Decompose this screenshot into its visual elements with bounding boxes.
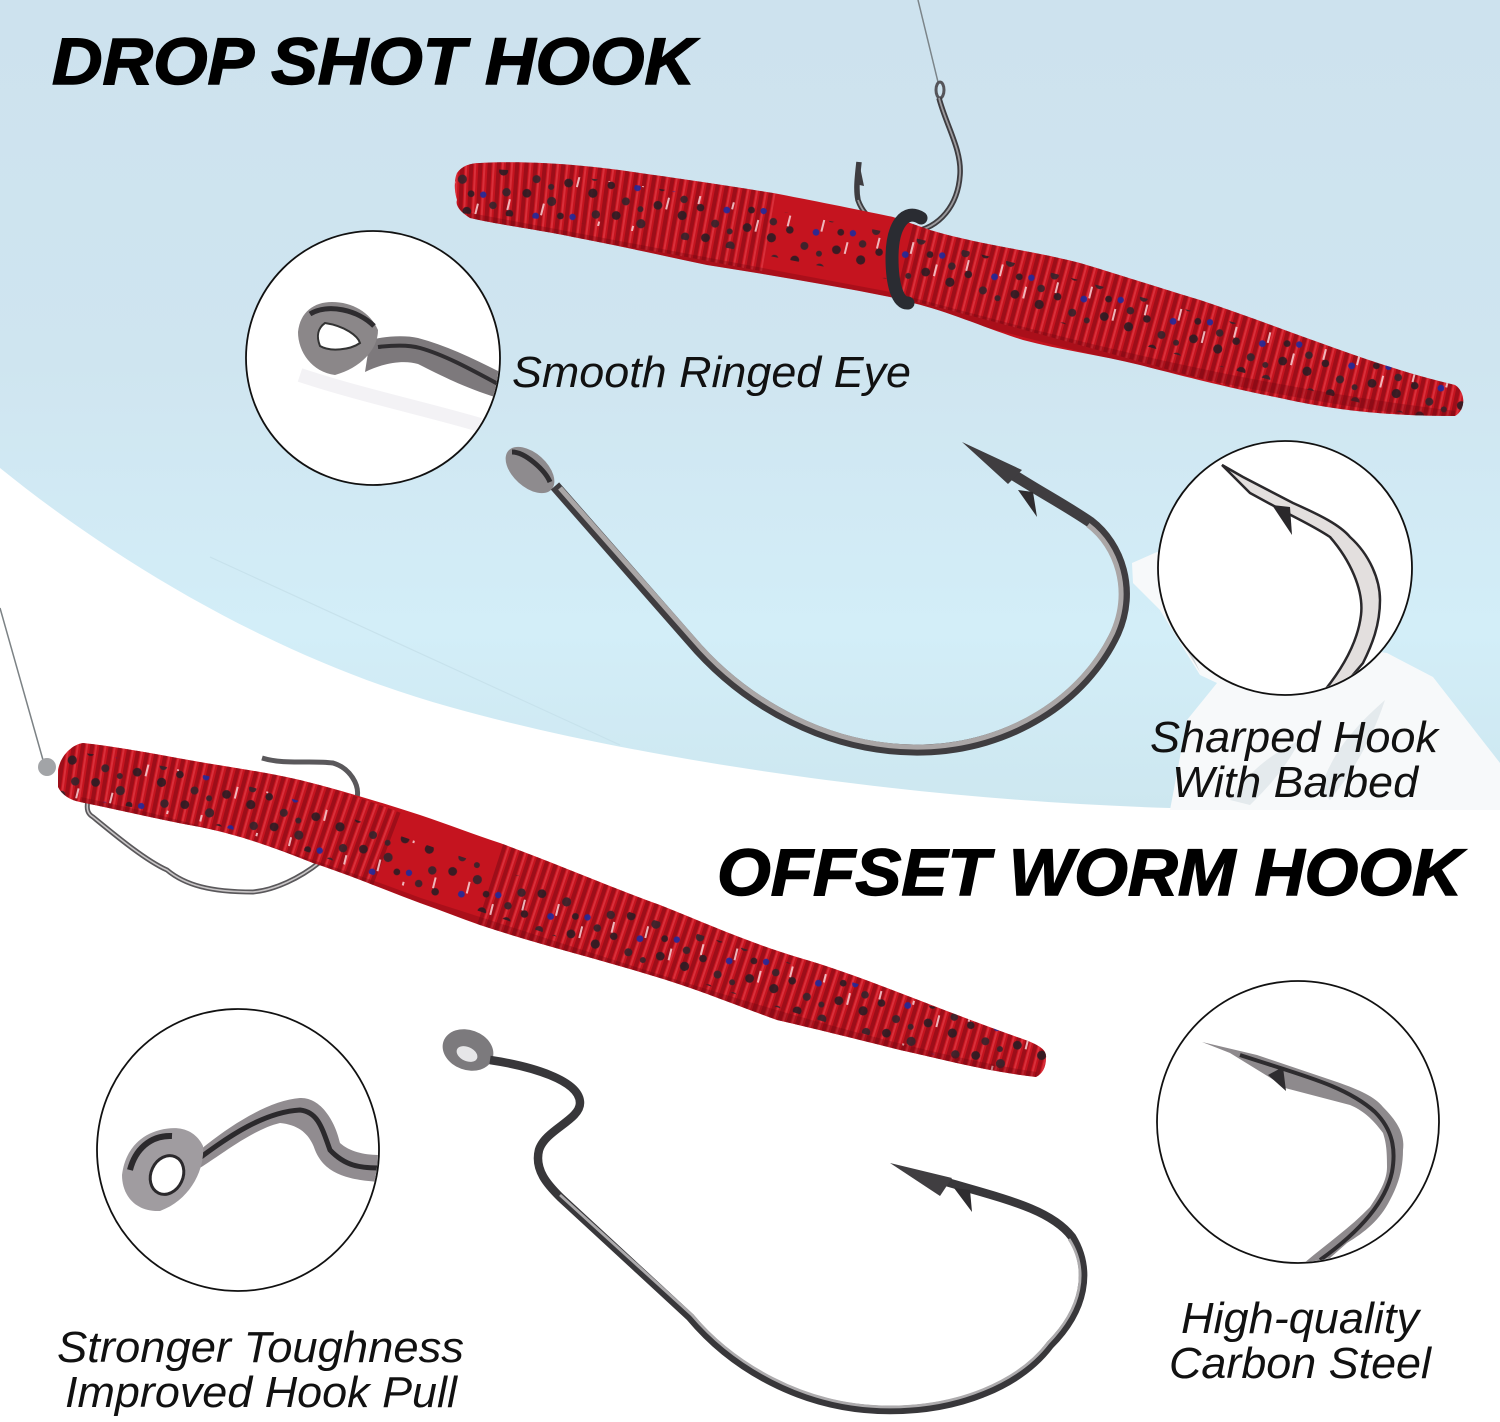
circle inset: offset eye <box>97 1009 380 1291</box>
rubber o-ring <box>892 215 921 303</box>
label: stronger toughness improved hook pull: Stronger Toughness <box>57 1323 464 1372</box>
circle inset: carbon steel point <box>1157 981 1439 1264</box>
worm: drop shot <box>450 162 1470 416</box>
label: stronger toughness improved hook pull: Improved Hook Pull <box>65 1368 458 1417</box>
label: smooth ringed eye: Smooth Ringed Eye <box>512 348 911 397</box>
label: sharped hook with barbed: With Barbed <box>1172 758 1420 807</box>
worm: offset <box>38 743 1055 1077</box>
label: high-quality carbon steel: High-quality <box>1181 1294 1422 1343</box>
large offset hook <box>437 1022 1083 1410</box>
large drop shot hook <box>497 438 1124 750</box>
fishing line: top <box>918 0 938 82</box>
label: sharped hook with barbed: Sharped Hook <box>1150 713 1440 762</box>
circle inset: ringed eye <box>246 231 500 485</box>
label: high-quality carbon steel: Carbon Steel <box>1169 1339 1432 1388</box>
label: sharped hook with barbed <box>1150 713 1440 807</box>
title: offset worm hook: OFFSET WORM HOOK <box>717 835 1467 909</box>
circle inset: sharpened point <box>1158 441 1412 695</box>
label: stronger toughness improved hook pull <box>57 1323 464 1417</box>
label: high-quality carbon steel <box>1169 1294 1432 1388</box>
fishing line: left <box>0 608 43 760</box>
hook on drop shot worm <box>855 82 960 232</box>
offset hook in worm <box>87 758 358 892</box>
title: drop shot hook: DROP SHOT HOOK <box>52 24 700 98</box>
blue backdrop <box>0 0 1500 810</box>
